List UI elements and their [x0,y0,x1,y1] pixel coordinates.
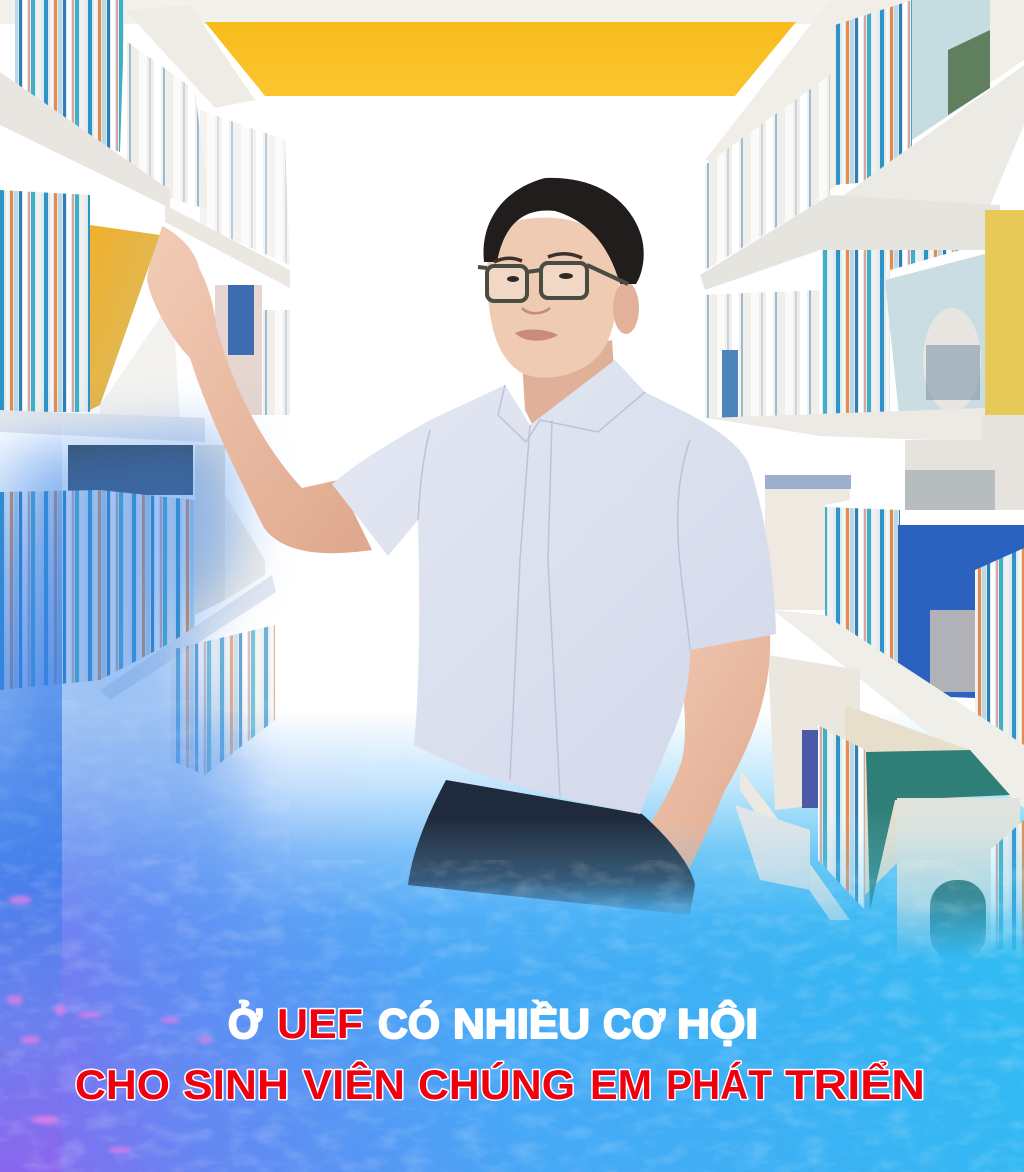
shirt [332,360,776,814]
eyes [507,276,519,282]
title line 1: CƠ [603,1000,665,1047]
neck [522,340,615,440]
left side tint [20,430,240,960]
title line 1: CÓ [378,999,440,1047]
title line 2: SINH [183,1061,289,1108]
title [75,999,925,1108]
title line 2: CHÚNG [418,1060,575,1108]
title line 1 [228,999,758,1047]
title line 1: Ở [228,999,262,1047]
other arm [620,630,770,885]
title line 1: HỘI [677,999,758,1047]
pink glitter accents [7,896,213,1153]
mouth [515,329,558,341]
hair [484,178,644,284]
nose [522,308,550,313]
right bookshelves [700,0,1024,960]
gradient water overlay [0,420,1024,1172]
left bookshelves [0,0,294,775]
eyebrows [494,254,582,262]
title line 2: PHÁT [666,1061,772,1108]
title line 2: VIÊN [303,1060,405,1108]
title line 2 [75,1060,925,1108]
person: student in library [147,178,776,915]
glasses [478,263,628,301]
face [487,218,619,378]
title line 1: UEF [277,1000,363,1047]
shirt details [418,385,690,796]
raised arm and hand [147,226,372,553]
title line 2: CHO [75,1061,170,1108]
trousers [408,780,695,915]
water texture [0,700,1024,1172]
title line 2: EM [590,1061,652,1108]
title line 1: NHIỀU [453,1000,590,1047]
title line 2: TRIỂN [785,1060,925,1108]
